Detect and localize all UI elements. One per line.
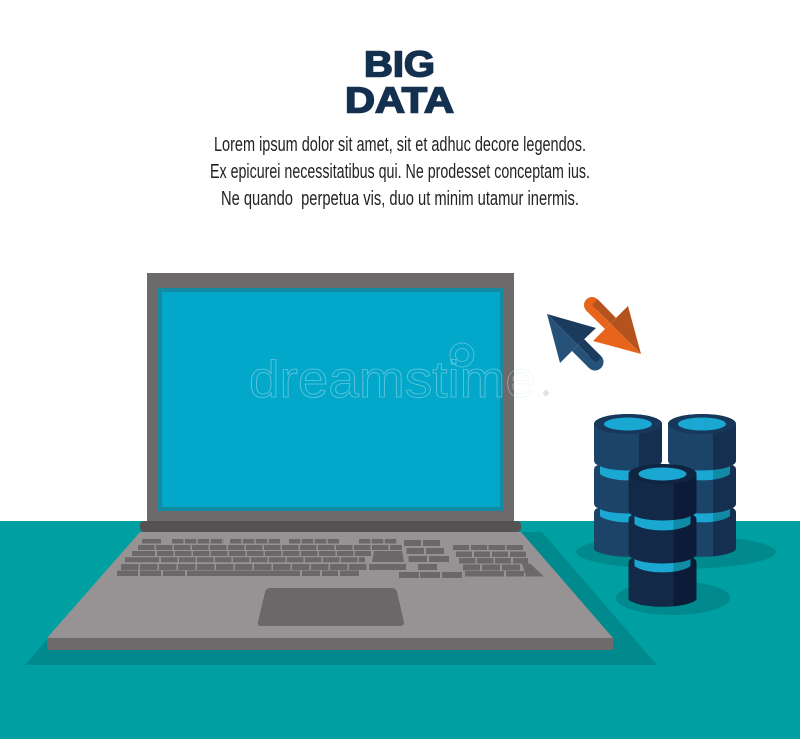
enter key <box>372 551 404 562</box>
description text block: Ne quando perpetua vis, duo ut minim utamur inermis. <box>221 188 579 210</box>
icon: orange cursor arrow <box>584 297 641 354</box>
laptop with shadow <box>25 273 657 665</box>
navigation keys <box>399 540 462 578</box>
title: BIG DATA <box>345 43 454 120</box>
touchpad <box>258 588 404 626</box>
number pad <box>453 545 544 576</box>
title: BIG DATA: DATA <box>345 79 454 120</box>
icon: left database stack <box>594 414 662 557</box>
laptop shadow <box>25 532 657 665</box>
description text block: Lorem ipsum dolor sit amet, sit et adhuc decore legendos. <box>214 134 586 156</box>
main key rows <box>117 541 406 573</box>
title: BIG DATA: BIG <box>364 43 435 84</box>
watermark: dreamstime <box>249 351 536 409</box>
laptop base deck <box>47 532 613 638</box>
icon: front database stack <box>628 464 696 607</box>
database stack shadows <box>576 535 776 615</box>
description text block: Ex epicurei necessitatibus qui. Ne prodesset conceptam ius. <box>210 161 590 183</box>
icon: right database stack <box>668 414 736 557</box>
teal table surface <box>0 521 800 739</box>
laptop lid <box>147 273 514 522</box>
laptop screen <box>158 288 503 511</box>
keyboard <box>117 540 544 578</box>
laptop hinge <box>140 521 521 532</box>
icon: blue cursor arrow <box>547 314 604 370</box>
description text block <box>210 134 590 210</box>
laptop front edge <box>47 638 613 650</box>
